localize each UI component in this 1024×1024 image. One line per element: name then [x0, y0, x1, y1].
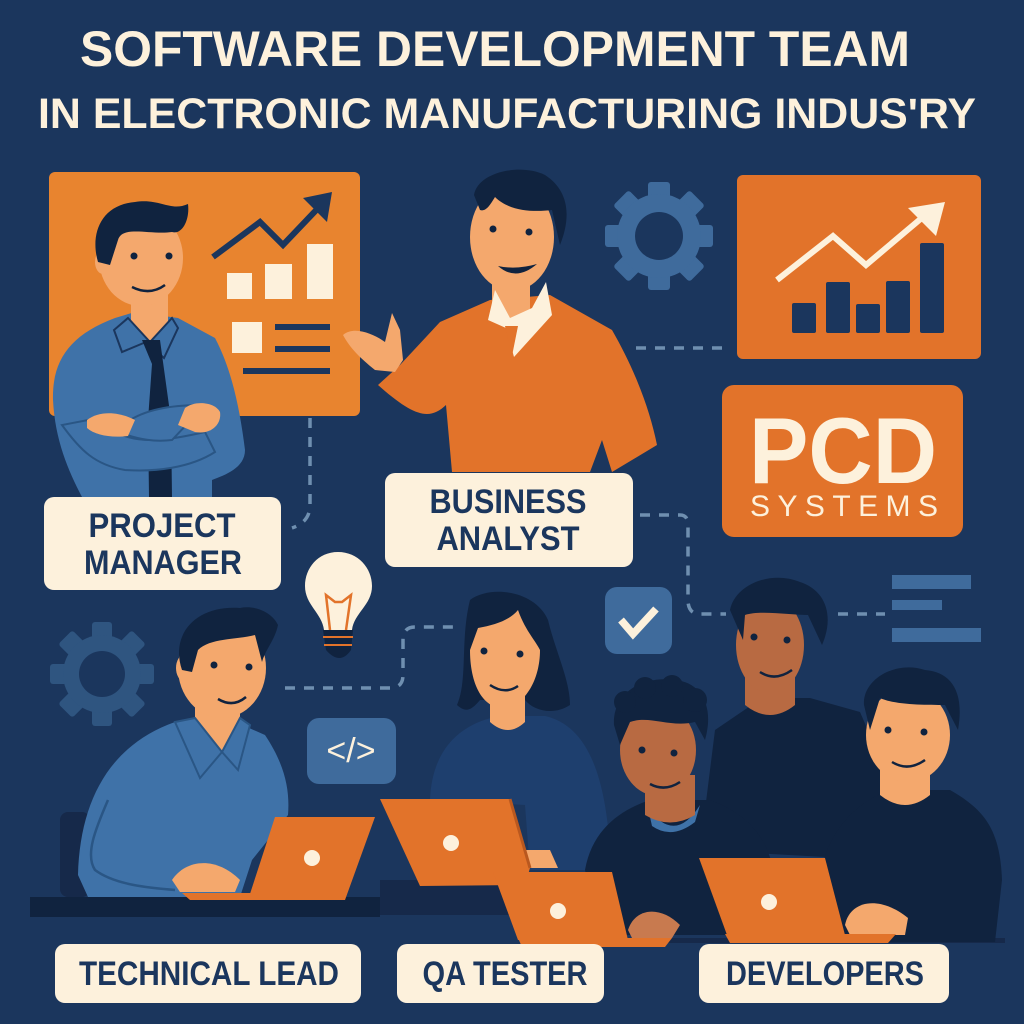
laptop: technical lead [182, 817, 375, 900]
desk [30, 897, 380, 917]
person: business analyst [343, 170, 657, 472]
icon: text lines [892, 575, 981, 642]
person: project manager [53, 201, 245, 497]
laptop: center developer [493, 872, 672, 947]
icon: check badge [605, 587, 672, 654]
label: QA tester [397, 944, 604, 1003]
label: QA tester: QA TESTER [422, 955, 588, 993]
laptop: QA tester [380, 799, 530, 886]
panel: PCD Systems logo: PCD [749, 398, 937, 503]
title: SOFTWARE DEVELOPMENT TEAM [80, 21, 910, 77]
person: standing developer [700, 578, 885, 860]
label: technical lead: TECHNICAL LEAD [79, 955, 339, 993]
icon: board chart [213, 192, 333, 374]
icon: code tag: </> [326, 732, 376, 770]
laptop: right developer [699, 858, 896, 943]
icon: left gear [50, 622, 154, 726]
person: seated developer right [820, 667, 1002, 942]
person: QA tester [430, 592, 610, 870]
label: developers [699, 944, 949, 1003]
person: seated developer center [585, 675, 775, 938]
panel: project manager presentation board [49, 172, 360, 416]
panel: PCD Systems logo: SYSTEMS [750, 490, 938, 523]
panel: PCD Systems logo [722, 385, 963, 537]
label: business analyst: BUSINESS [430, 483, 586, 521]
chair and desk shadow [60, 812, 1005, 943]
label: business analyst [385, 473, 633, 567]
label: project manager [44, 497, 281, 590]
label: project manager: PROJECT [88, 507, 236, 545]
label: developers: DEVELOPERS [726, 955, 924, 993]
person: technical lead [78, 607, 288, 897]
label: business analyst: ANALYST [436, 520, 580, 558]
title [38, 21, 976, 138]
icon: light bulb [305, 552, 372, 658]
label: technical lead [55, 944, 361, 1003]
icon: large gear top [605, 182, 713, 290]
title: IN ELECTRONIC MANUFACTURING INDUS'RY [38, 90, 976, 138]
icon: code tag [307, 718, 396, 784]
panel: growth chart [737, 175, 981, 359]
dashed connectors [285, 348, 885, 688]
label: project manager: MANAGER [84, 544, 242, 582]
arm hands [87, 403, 220, 437]
